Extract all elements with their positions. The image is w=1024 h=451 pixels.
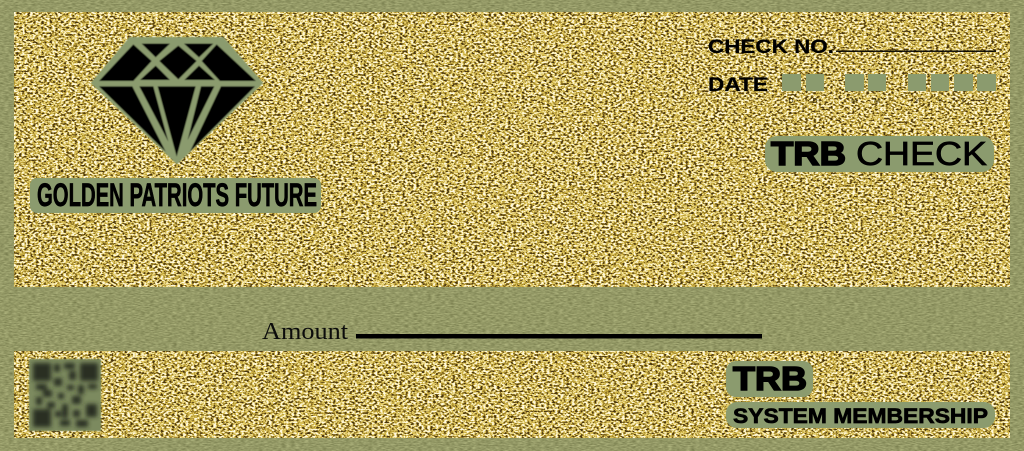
heading: TRB Check bbox=[765, 135, 994, 172]
label: System Membership: SYSTEM MEMBERSHIP bbox=[733, 405, 988, 428]
date field: DATE bbox=[708, 75, 768, 96]
label: TRB: TRB bbox=[733, 360, 807, 397]
date field: D bbox=[812, 98, 818, 105]
logo name: Golden Patriots Future bbox=[30, 177, 321, 213]
date field: M bbox=[874, 98, 880, 105]
amount line bbox=[262, 319, 762, 345]
heading: TRB Check: TRB bbox=[771, 135, 846, 172]
icon: blurred QR code bbox=[29, 359, 101, 431]
logo name: Golden Patriots Future: GOLDEN PATRIOTS FUTURE bbox=[37, 177, 317, 213]
panel: upper gold field bbox=[14, 12, 1010, 287]
date field: M bbox=[851, 98, 857, 105]
amount line: Amount bbox=[262, 319, 348, 345]
panel: lower gold strip bbox=[14, 351, 1010, 438]
date field: D bbox=[788, 98, 794, 105]
date field: Y bbox=[915, 98, 920, 105]
icon: diamond logo bbox=[92, 38, 262, 163]
date field: Y bbox=[984, 98, 989, 105]
date field: Y bbox=[961, 98, 966, 105]
date field bbox=[708, 74, 996, 105]
heading: TRB Check: CHECK bbox=[856, 135, 987, 172]
date field: Y bbox=[938, 98, 943, 105]
check number field: CHECK NO. bbox=[708, 37, 834, 58]
